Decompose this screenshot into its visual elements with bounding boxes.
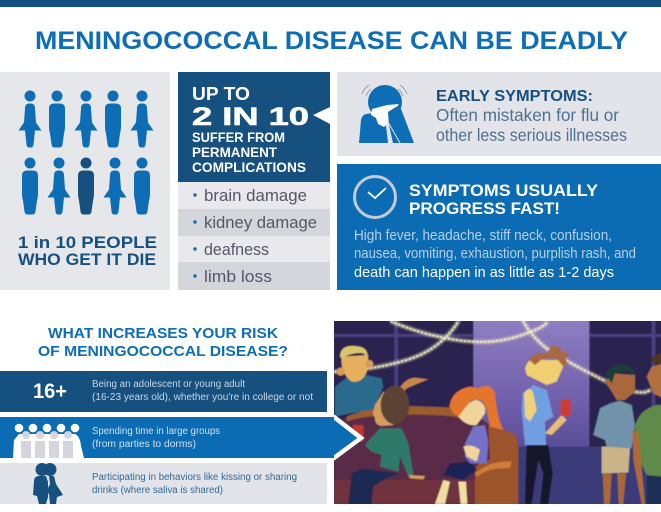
heading: up to 2 in 10: SUFFER FROM <box>192 130 285 145</box>
text: behaviors <box>92 472 297 496</box>
list: complications: limb loss <box>204 267 272 286</box>
text: adolescent or young adult: (16-23 years old), whether you're in college or not <box>92 392 313 403</box>
text: symptom list: death can happen in as little as 1-2 days <box>354 265 614 281</box>
text: behaviors: Participating in behaviors like kissing or sharing <box>92 472 297 483</box>
string lights <box>335 322 650 392</box>
text: adolescent or young adult <box>92 379 313 403</box>
heading: up to 2 in 10: PERMANENT <box>192 145 278 160</box>
list: complications: kidney damage <box>204 213 317 232</box>
text: large groups: (from parties to dorms) <box>92 439 196 450</box>
icon: kissing couple <box>33 463 63 504</box>
heading: what increases your risk: WHAT INCREASES YOUR RISK <box>48 325 278 342</box>
list: complications: brain damage <box>204 186 307 205</box>
heading: symptoms usually progress fast: SYMPTOMS USUALLY <box>409 181 599 200</box>
panel: symptoms progress fast <box>337 164 661 290</box>
text: early symptoms: other less serious illnesses <box>436 125 627 145</box>
heading: symptoms usually progress fast <box>409 181 599 218</box>
icon: pictogram of ten people <box>18 90 154 214</box>
couch <box>334 406 518 504</box>
text: adolescent or young adult: Being an adolescent or young adult <box>92 379 245 390</box>
window frames <box>334 321 661 407</box>
text: symptom list <box>354 228 636 281</box>
illustration: house party <box>330 317 661 507</box>
text: large groups <box>92 426 220 450</box>
text: early symptoms <box>436 88 627 145</box>
icon: person holding head <box>359 85 414 143</box>
row: large groups arrow <box>0 417 361 458</box>
girl with red hair <box>435 386 503 504</box>
text: 1 in 10 people who get it die: WHO GET IT DIE <box>18 250 156 269</box>
man at right edge <box>633 352 661 507</box>
text: 1 in 10 people who get it die <box>18 233 157 269</box>
heading: up to 2 in 10: 2 IN 10 <box>192 103 309 131</box>
wall <box>472 321 648 504</box>
text: symptom list: High fever, headache, stiff neck, confusion, <box>354 228 612 244</box>
heading: up to 2 in 10: UP TO <box>192 84 250 104</box>
text: early symptoms: EARLY SYMPTOMS: <box>436 88 593 105</box>
text: behaviors: drinks (where saliva is shared) <box>92 485 223 496</box>
text: symptom list: nausea, vomiting, exhaustion, purplish rash, and <box>354 246 636 262</box>
heading: up to 2 in 10: COMPLICATIONS <box>192 160 306 175</box>
title: MENINGOCOCCAL DISEASE CAN BE DEADLY <box>35 27 628 55</box>
text: early symptoms: Often mistaken for flu or <box>436 105 619 125</box>
label: 16+: 16+ <box>33 380 67 403</box>
list: complications: deafness <box>204 240 269 259</box>
top bar <box>0 0 661 7</box>
man in green sweater <box>348 386 425 504</box>
icon: crowd <box>13 424 84 458</box>
man in shorts <box>593 364 635 504</box>
panel: permanent complications <box>178 72 330 290</box>
text: large groups: Spending time in large groups <box>92 426 220 437</box>
row: age 16+ <box>0 371 327 412</box>
blond man <box>335 346 428 417</box>
standing man with cup <box>522 345 571 504</box>
heading: what increases your risk: OF MENINGOCOCCAL DISEASE? <box>38 343 288 360</box>
panel: early symptoms <box>337 72 661 156</box>
heading: what increases your risk <box>38 325 288 360</box>
heading: up to 2 in 10 <box>192 84 309 175</box>
heading: symptoms usually progress fast: PROGRESS FAST! <box>409 199 560 218</box>
panel: 1 in 10 people <box>0 72 170 290</box>
notch pointer <box>313 107 330 124</box>
list: complications <box>178 182 330 290</box>
row: kissing or sharing drinks <box>0 463 327 504</box>
text: 1 in 10 people who get it die: 1 in 10 PEOPLE <box>18 233 157 252</box>
icon: clock <box>354 176 396 218</box>
